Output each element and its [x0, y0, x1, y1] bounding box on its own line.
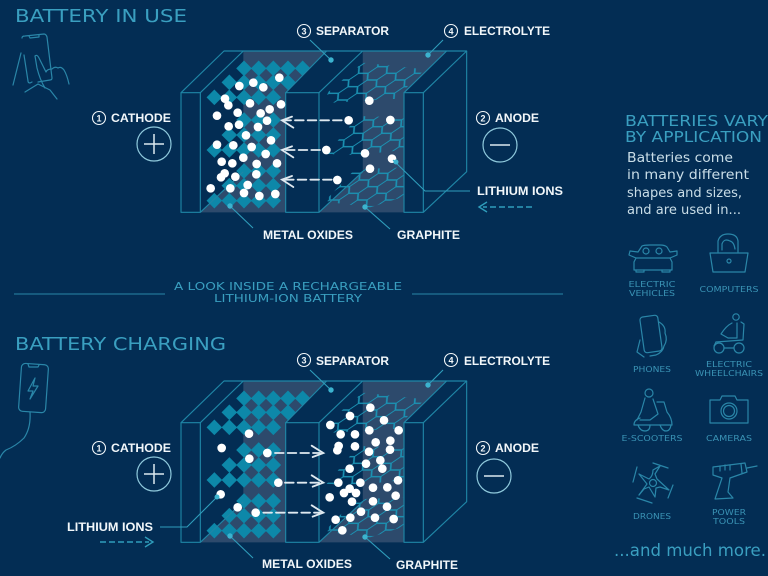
label: phones: PHONES — [633, 365, 671, 374]
central caption with divider lines: A LOOK INSIDE A RECHARGEABLE — [174, 280, 402, 293]
label: cathode with plus sign: 1 — [96, 114, 102, 124]
label: metal oxides — [227, 203, 353, 242]
label: anode with minus sign (charging): ANODE — [495, 441, 539, 455]
label: power tools: TOOLS — [712, 517, 745, 526]
label: drones: DRONES — [633, 512, 671, 521]
label: electrolyte (charging): ELECTROLYTE — [464, 354, 550, 368]
label: cathode with plus sign (charging): 1 — [96, 444, 102, 454]
label: cameras: CAMERAS — [706, 434, 752, 443]
icon: phone charging with cable — [0, 363, 49, 458]
arrows: ions moving to anode — [263, 446, 323, 517]
label: graphite — [362, 204, 460, 242]
label: separator — [298, 24, 389, 63]
lithium ions — [217, 404, 403, 534]
heading: BY APPLICATION — [625, 128, 762, 146]
label: computers: COMPUTERS — [700, 285, 758, 294]
icon: laptop computer — [710, 234, 748, 272]
intro text: shapes and sizes, — [627, 186, 742, 201]
intro text: in many different — [627, 168, 749, 183]
battery frame with metal oxides and graphite — [181, 381, 467, 542]
label: anode with minus sign: 2 — [480, 114, 486, 124]
label: cathode with plus sign: CATHODE — [111, 111, 171, 125]
title: battery in use: BATTERY IN USE — [15, 6, 187, 27]
label: separator: 3 — [301, 26, 307, 36]
central caption with divider lines: LITHIUM-ION BATTERY — [214, 292, 362, 305]
battery diagram: charging — [181, 381, 467, 542]
central caption with divider lines — [14, 280, 563, 305]
icon: phone in hand — [637, 315, 666, 357]
panel: batteries vary by application — [614, 112, 768, 561]
label: lithium ions: LITHIUM IONS — [477, 184, 563, 198]
label: graphite: GRAPHITE — [397, 228, 460, 242]
label: electrolyte: 4 — [448, 26, 454, 36]
label: electric wheelchairs: ELECTRIC — [706, 360, 752, 369]
intro text — [627, 151, 749, 218]
label: electric vehicles: VEHICLES — [629, 289, 675, 298]
label: electric vehicles: ELECTRIC — [628, 280, 676, 289]
label: electrolyte (charging): 4 — [448, 356, 454, 366]
icon: power drill — [713, 463, 757, 499]
label: cathode with plus sign (charging) — [92, 441, 171, 491]
label: power tools — [712, 508, 746, 526]
icon: electric vehicle — [629, 245, 677, 272]
label: anode with minus sign — [476, 111, 539, 162]
icon: camera — [710, 396, 748, 423]
icon: drone — [633, 463, 673, 503]
lithium ions — [207, 74, 396, 200]
title: battery charging: BATTERY CHARGING — [15, 334, 226, 355]
label: electric vehicles — [628, 280, 676, 298]
label: metal oxides: METAL OXIDES — [263, 228, 353, 242]
label: cathode with plus sign (charging): CATHODE — [111, 441, 171, 455]
icon: hand holding phone — [13, 34, 69, 99]
label: power tools: POWER — [712, 508, 746, 517]
battery diagram: in use — [181, 51, 467, 212]
arrows: ions moving to cathode — [282, 117, 342, 187]
label: metal oxides (charging) — [227, 533, 352, 571]
label: electrolyte: ELECTROLYTE — [464, 24, 550, 38]
label: lithium ions (charging) — [67, 494, 220, 547]
label: electrolyte (charging) — [425, 354, 550, 388]
label: anode with minus sign (charging): 2 — [480, 444, 486, 454]
intro text: and are used in... — [627, 203, 741, 218]
closing text: ...and much more. — [614, 541, 766, 561]
label: graphite (charging): GRAPHITE — [396, 558, 458, 572]
label: cathode with plus sign — [92, 111, 171, 161]
label: separator (charging) — [298, 354, 389, 393]
label: anode with minus sign: ANODE — [495, 111, 539, 125]
label: lithium ions (charging): LITHIUM IONS — [67, 520, 153, 534]
label: e-scooters: E-SCOOTERS — [622, 434, 682, 443]
label: separator (charging): 3 — [301, 356, 307, 366]
label: electric wheelchairs: WHEELCHAIRS — [695, 369, 763, 378]
icon: e-scooter — [634, 389, 672, 431]
intro text: Batteries come — [627, 151, 733, 166]
label: lithium ions — [393, 160, 563, 212]
label: separator (charging): SEPARATOR — [316, 354, 389, 368]
label: anode with minus sign (charging) — [476, 441, 539, 493]
label: metal oxides (charging): METAL OXIDES — [262, 557, 352, 571]
heading — [625, 112, 768, 146]
label: electric wheelchairs — [695, 360, 763, 378]
label: graphite (charging) — [362, 534, 458, 572]
label: separator: SEPARATOR — [316, 24, 389, 38]
battery frame with metal oxides and graphite — [181, 51, 467, 212]
heading: BATTERIES VARY — [625, 112, 768, 130]
label: electrolyte — [425, 24, 550, 58]
icon: electric wheelchair — [714, 314, 744, 353]
